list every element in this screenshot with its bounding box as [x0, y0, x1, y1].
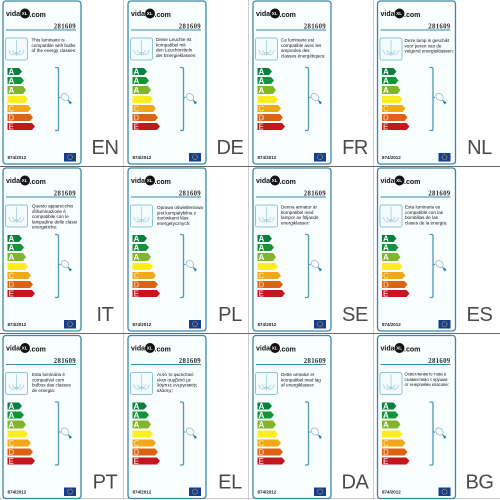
- icon: chandelier: [6, 372, 28, 394]
- energy class bars: E: [383, 457, 389, 466]
- logo: [131, 343, 171, 354]
- panel: SE label: [253, 168, 368, 331]
- logo: .com: [30, 179, 46, 186]
- energy class bars: E: [8, 122, 14, 132]
- description text: ampoules des: [281, 48, 310, 53]
- icon: EU flag: [64, 488, 76, 496]
- icon: chandelier: [6, 205, 28, 227]
- energy class bars: A: [383, 76, 389, 86]
- description text: kompatibel mit: [156, 42, 186, 47]
- energy class bars: [382, 234, 410, 298]
- energy class bars: [8, 234, 35, 298]
- product code: 281609: [304, 24, 326, 30]
- description text: Deze lamp is geschikt: [404, 38, 450, 43]
- bracket and bulb icon: [55, 234, 72, 298]
- icon: EU flag: [314, 153, 326, 162]
- energy class bars: C: [258, 104, 264, 114]
- logo: XL: [396, 346, 402, 351]
- description text: bulbos das classes: [32, 383, 72, 388]
- description text: Oprawa oświetleniowa: [157, 205, 203, 210]
- logo: .com: [404, 346, 420, 354]
- icon: chandelier: [130, 205, 152, 227]
- regulation number: 874/2012: [382, 490, 401, 494]
- icon: chandelier: [130, 372, 152, 394]
- regulation number: 874/2012: [258, 322, 277, 327]
- description text: compatible con las: [405, 210, 444, 215]
- logo: .com: [280, 12, 296, 19]
- energy class bars: A: [134, 253, 140, 262]
- description text: compatível com: [32, 377, 64, 382]
- energy class bars: A: [8, 402, 14, 411]
- logo: vida: [256, 178, 270, 185]
- energy class bars: D: [8, 448, 14, 457]
- logo: [6, 8, 46, 19]
- energy class bars: [132, 234, 160, 298]
- language code: SE: [342, 304, 368, 326]
- energy class bars: D: [134, 114, 140, 122]
- energy class bars: A: [8, 253, 14, 262]
- energy class bars: A: [134, 411, 140, 420]
- panel: EL label: [128, 336, 242, 498]
- bracket and bulb icon: [305, 234, 322, 298]
- language code: PL: [218, 304, 242, 326]
- energy class bars: C: [383, 104, 389, 114]
- product code: 281609: [179, 190, 201, 198]
- energy class bars: A: [8, 76, 14, 86]
- logo: .com: [404, 12, 420, 19]
- logo: vida: [131, 346, 145, 352]
- energy class bars: D: [258, 448, 264, 457]
- bracket and bulb icon: [430, 68, 446, 130]
- energy class bars: C: [8, 104, 14, 114]
- logo: XL: [22, 346, 28, 351]
- energy class bars: D: [383, 448, 389, 457]
- energy class bars: E: [258, 290, 264, 298]
- energy class bars: A: [8, 244, 14, 252]
- energy class bars: [258, 402, 285, 466]
- energy class bars: A: [258, 402, 264, 411]
- energy class bars: E: [134, 122, 140, 132]
- energy class bars: A: [134, 68, 140, 76]
- energy class bars: [382, 402, 410, 466]
- regulation number: 874/2012: [8, 322, 27, 327]
- energy class bars: D: [383, 114, 389, 122]
- energy class bars: A: [383, 402, 389, 411]
- energy class bars: D: [134, 448, 140, 457]
- energy class bars: E: [134, 457, 140, 466]
- product code: 281609: [179, 24, 201, 30]
- energy class bars: A: [383, 234, 389, 244]
- energy class bars: C: [134, 272, 140, 280]
- energy class bars: C: [8, 439, 14, 448]
- energy class bars: [132, 68, 160, 132]
- description text: Esta luminaria es: [405, 204, 441, 210]
- energy class bars: A: [8, 234, 14, 244]
- energy class bars: D: [134, 280, 140, 290]
- energy class bars: A: [383, 86, 389, 95]
- description text: der Energieklassen:: [156, 53, 197, 58]
- energy class bars: E: [383, 122, 389, 132]
- logo: XL: [147, 346, 153, 351]
- logo: [380, 176, 420, 186]
- energy class bars: A: [134, 234, 140, 244]
- panel: EN label: [3, 1, 118, 164]
- language code: EN: [92, 137, 118, 159]
- energy class bars: A: [134, 76, 140, 86]
- description text: κλάσης:: [157, 387, 173, 393]
- logo: [6, 176, 46, 186]
- description text: Ce luminaire est: [281, 38, 315, 42]
- panel: DA label: [253, 336, 370, 498]
- energy class bars: D: [383, 280, 389, 290]
- icon: EU flag: [438, 320, 450, 328]
- logo: [131, 176, 171, 186]
- language code: NL: [467, 137, 492, 159]
- energy class bars: A: [8, 86, 14, 95]
- description text: Esta luminária é: [32, 372, 65, 377]
- regulation number: 874/2012: [132, 490, 152, 494]
- logo: vida: [6, 346, 20, 352]
- panel: DE label: [128, 1, 244, 164]
- icon: EU flag: [189, 153, 201, 162]
- bracket and bulb icon: [180, 234, 197, 298]
- regulation number: 874/2012: [258, 490, 277, 494]
- energy class bars: A: [383, 253, 389, 262]
- logo: .com: [154, 12, 171, 19]
- description text: jest kompatybilna z: [156, 210, 197, 215]
- energy class bars: E: [383, 290, 389, 298]
- language code: PT: [93, 472, 118, 494]
- description text: είναι συμβατό με: [157, 376, 191, 382]
- energy class bars: A: [258, 244, 264, 252]
- panel: FR label: [253, 1, 368, 164]
- description text: żarówkami klas: [157, 216, 189, 221]
- bracket and bulb icon: [305, 68, 322, 130]
- product code: 281609: [179, 358, 201, 365]
- bracket and bulb icon: [305, 402, 322, 465]
- energy class bars: [258, 68, 285, 132]
- description text: compatible with bulbs: [32, 43, 76, 48]
- description text: volgend energieklassen:: [404, 49, 454, 54]
- product code: 281609: [304, 358, 326, 365]
- description text: den Leuchtmitteln: [156, 48, 193, 53]
- description text: clases de la energía:: [405, 220, 447, 225]
- regulation number: 874/2012: [132, 155, 152, 160]
- product code: 281609: [428, 24, 451, 30]
- description text: compatibile con le: [32, 214, 69, 219]
- energy class bars: A: [383, 411, 389, 420]
- product code: 281609: [428, 358, 451, 365]
- energy class bars: C: [134, 439, 140, 448]
- logo: .com: [30, 346, 46, 354]
- icon: chandelier: [6, 38, 28, 60]
- icon: chandelier: [256, 38, 278, 60]
- energy class bars: D: [258, 280, 264, 290]
- energy class bars: C: [383, 439, 389, 448]
- energy class bars: E: [134, 290, 140, 298]
- description text: bombillas de las: [405, 215, 439, 220]
- bracket and bulb icon: [180, 68, 197, 130]
- panel: PL label: [128, 168, 242, 331]
- language code: ES: [467, 304, 492, 326]
- icon: chandelier: [256, 372, 278, 394]
- energy class bars: [382, 68, 410, 132]
- energy class bars: D: [8, 114, 14, 122]
- description text: af energiklasser:: [281, 383, 315, 388]
- product code: 281609: [54, 358, 76, 365]
- logo: vida: [6, 178, 20, 185]
- logo: XL: [22, 178, 28, 183]
- logo: XL: [147, 178, 153, 183]
- language code: DE: [217, 137, 244, 159]
- regulation number: 874/2012: [8, 490, 27, 494]
- description text: compatible avec les: [281, 43, 322, 48]
- description text: voor peren van de: [404, 43, 442, 48]
- logo: vida: [131, 11, 145, 18]
- logo: [6, 343, 46, 354]
- description text: от енергийни класове:: [404, 382, 449, 387]
- description text: kompatibel med: [281, 210, 314, 215]
- description text: Αυτό το φωτιστικό: [157, 371, 194, 377]
- logo: .com: [404, 179, 420, 186]
- icon: EU flag: [64, 320, 76, 328]
- logo: XL: [147, 11, 153, 16]
- logo: XL: [272, 11, 278, 16]
- icon: chandelier: [256, 205, 278, 227]
- logo: [380, 343, 420, 354]
- product code: 281609: [54, 190, 76, 198]
- bracket and bulb icon: [55, 402, 72, 465]
- panel: PT label: [3, 336, 118, 498]
- energy class bars: [258, 234, 285, 298]
- bracket and bulb icon: [430, 234, 446, 298]
- energy class bars: E: [8, 457, 14, 466]
- description text: energetiche:: [32, 225, 57, 230]
- panel: NL label: [378, 1, 492, 164]
- energy class bars: A: [258, 86, 264, 95]
- icon: EU flag: [314, 320, 326, 328]
- energy class bars: A: [134, 86, 140, 95]
- description text: de energia:: [32, 388, 55, 393]
- regulation number: 874/2012: [8, 155, 27, 160]
- energy class bars: E: [8, 290, 14, 298]
- description text: Denna armatur är: [281, 204, 317, 210]
- logo: vida: [380, 178, 395, 185]
- description text: classes énergétiques:: [281, 53, 325, 58]
- energy class bars: C: [258, 272, 264, 280]
- energy class bars: A: [258, 68, 264, 76]
- description text: λάμπες ενεργειακής: [157, 382, 198, 388]
- language code: FR: [342, 137, 368, 159]
- energy class bars: A: [258, 234, 264, 244]
- regulation number: 874/2012: [382, 155, 401, 160]
- energy class bars: A: [258, 253, 264, 262]
- energy class bars: A: [258, 411, 264, 420]
- language code: IT: [97, 304, 114, 326]
- energy class bars: A: [8, 420, 14, 430]
- description text: Questo apparecchio: [32, 204, 74, 208]
- icon: EU flag: [189, 320, 201, 328]
- logo: vida: [6, 11, 20, 18]
- energy class bars: A: [383, 68, 389, 76]
- logo: .com: [30, 12, 46, 19]
- description text: energiklasser:: [281, 220, 310, 225]
- icon: EU flag: [189, 488, 201, 496]
- icon: EU flag: [64, 153, 76, 162]
- energy class bars: A: [258, 420, 264, 430]
- logo: [256, 8, 296, 19]
- energy class bars: A: [134, 244, 140, 252]
- energy class bars: C: [134, 104, 140, 114]
- icon: chandelier: [380, 205, 402, 227]
- logo: vida: [380, 11, 395, 18]
- logo: vida: [380, 346, 395, 352]
- panel: BG label: [378, 336, 494, 498]
- icon: chandelier: [380, 372, 402, 394]
- product code: 281609: [304, 190, 326, 198]
- logo: .com: [280, 346, 296, 354]
- language code: EL: [218, 472, 242, 494]
- logo: XL: [396, 178, 402, 183]
- description text: of the energy classes:: [32, 48, 76, 53]
- energy class bars: A: [8, 68, 14, 76]
- description text: lampor av följande: [281, 215, 319, 220]
- energy class bars: A: [134, 420, 140, 430]
- logo: .com: [154, 346, 171, 354]
- description text: energetycznych:: [157, 221, 190, 226]
- logo: vida: [131, 178, 145, 185]
- panel: IT label: [3, 168, 114, 331]
- energy class bars: C: [383, 272, 389, 280]
- description text: d'illuminazione è: [32, 209, 66, 214]
- energy class bars: [8, 402, 35, 466]
- language code: BG: [465, 472, 494, 494]
- logo: [256, 176, 296, 186]
- language code: DA: [342, 472, 370, 494]
- regulation number: 874/2012: [132, 322, 152, 327]
- energy class bars: D: [8, 280, 14, 290]
- energy class bars: A: [383, 420, 389, 430]
- logo: XL: [396, 11, 402, 16]
- icon: chandelier: [130, 38, 152, 60]
- logo: [256, 343, 296, 354]
- icon: EU flag: [314, 488, 326, 496]
- logo: XL: [22, 11, 28, 16]
- energy class bars: C: [258, 439, 264, 448]
- description text: kompatibel med lag: [281, 377, 321, 382]
- logo: XL: [272, 178, 278, 183]
- description text: Diese Leuchte ist: [156, 37, 192, 42]
- product code: 281609: [428, 190, 451, 198]
- energy class bars: E: [258, 122, 264, 132]
- icon: chandelier: [380, 38, 402, 60]
- logo: vida: [256, 346, 270, 352]
- energy class bars: A: [258, 76, 264, 86]
- icon: EU flag: [438, 153, 450, 162]
- product code: 281609: [54, 24, 76, 30]
- icon: EU flag: [438, 488, 450, 496]
- energy class bars: C: [8, 272, 14, 280]
- bracket and bulb icon: [55, 68, 72, 130]
- logo: .com: [280, 179, 296, 186]
- energy class bars: A: [8, 411, 14, 420]
- description text: съвместимо с крушки: [404, 377, 448, 382]
- bracket and bulb icon: [430, 402, 446, 465]
- description text: This luminaire is: [32, 38, 65, 42]
- energy class bars: D: [258, 114, 264, 122]
- description text: Осветлението това е: [404, 372, 447, 376]
- regulation number: 874/2012: [382, 322, 401, 327]
- logo: [380, 8, 420, 19]
- bracket and bulb icon: [180, 402, 197, 465]
- energy class bars: [8, 68, 35, 132]
- description text: Dette armatur er: [281, 372, 315, 377]
- logo: vida: [256, 11, 270, 18]
- energy class bars: E: [258, 457, 264, 466]
- energy class bars: [132, 402, 160, 466]
- description text: lampadine delle classi: [32, 219, 77, 224]
- energy class bars: A: [383, 244, 389, 252]
- logo: XL: [272, 346, 278, 351]
- energy class bars: A: [134, 402, 140, 411]
- panel: ES label: [378, 168, 492, 331]
- logo: .com: [154, 179, 171, 186]
- logo: [131, 8, 171, 19]
- regulation number: 874/2012: [258, 155, 277, 160]
